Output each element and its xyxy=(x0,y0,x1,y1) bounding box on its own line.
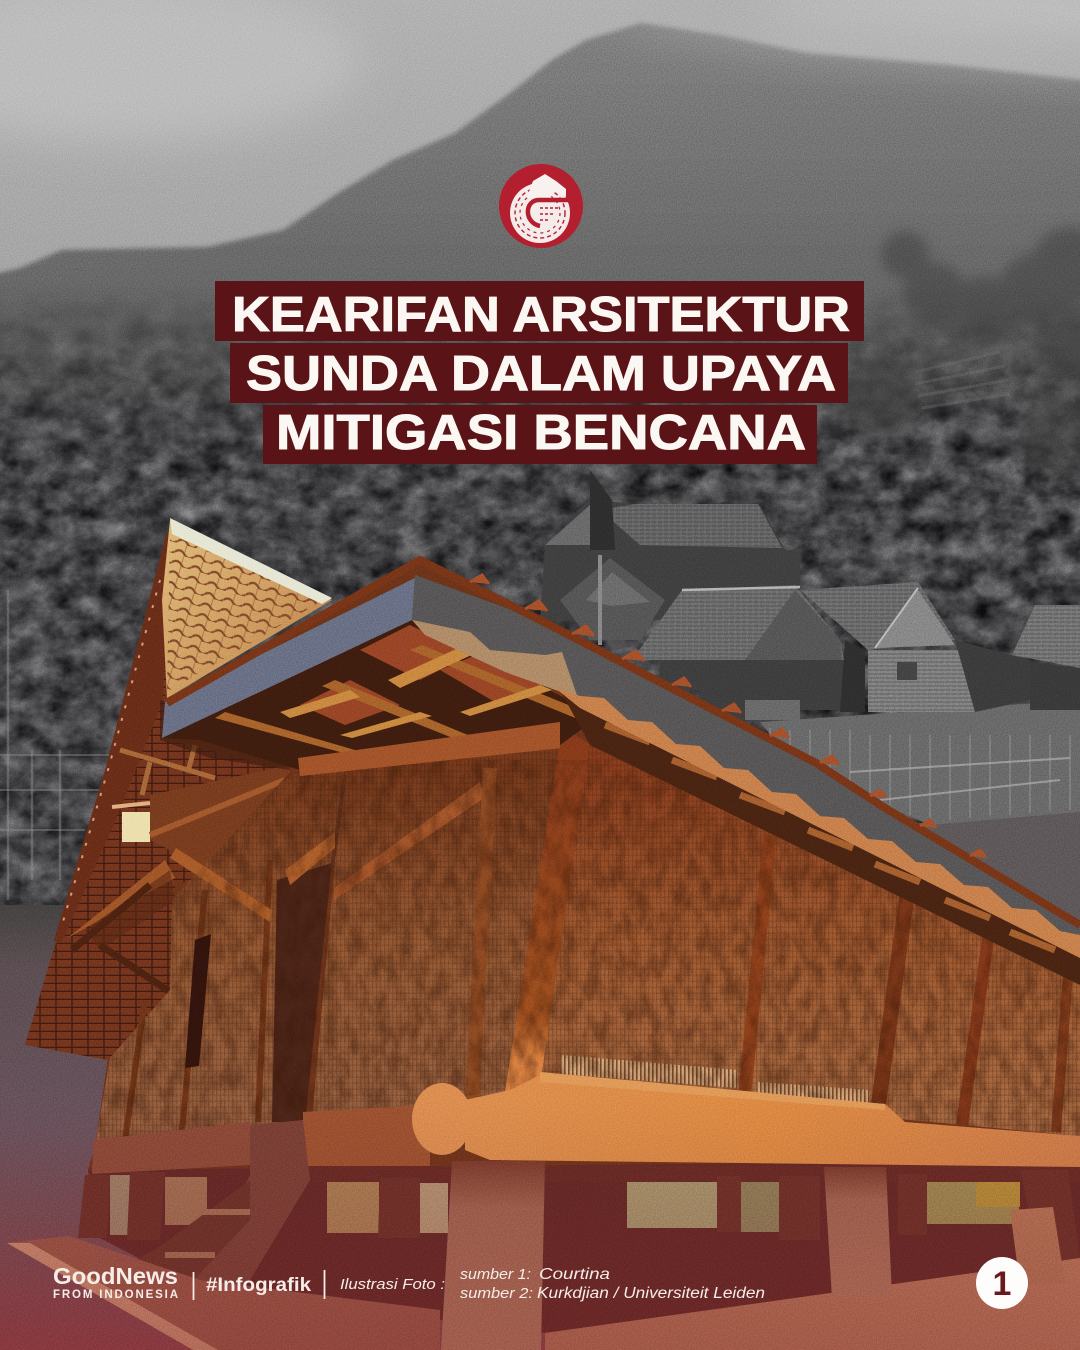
house: wall mottling xyxy=(98,760,1080,1139)
footer credits xyxy=(53,1263,765,1302)
background: village houses xyxy=(540,470,1080,722)
hashtag: #Infografik xyxy=(206,1275,311,1296)
middle house xyxy=(632,585,850,722)
brand logotype: GoodNews xyxy=(53,1263,178,1289)
background: forest xyxy=(0,227,1080,930)
source 1 xyxy=(460,1266,610,1283)
house: back gable tiles xyxy=(162,518,332,698)
house: main floor beam xyxy=(303,1072,1080,1182)
house: front stilts xyxy=(441,1161,892,1350)
title line 3: MITIGASI BENCANA xyxy=(276,406,806,460)
right treeline xyxy=(842,227,1080,480)
house: left side roof edge and gable underside xyxy=(54,528,290,955)
source 1: Courtina xyxy=(539,1266,610,1283)
foreground: right ground xyxy=(545,1258,1080,1350)
source 2: Kurkdjian / Universiteit Leiden xyxy=(537,1285,765,1302)
title xyxy=(215,281,864,464)
stone block xyxy=(1010,1207,1065,1285)
background: bamboo fence and grass xyxy=(0,590,1080,900)
house: lower left roof xyxy=(25,870,175,1060)
source 1: sumber 1: xyxy=(460,1266,531,1283)
house: dark crawl space xyxy=(88,1160,1080,1333)
bottom colour fade xyxy=(0,1100,1080,1350)
house: corner post xyxy=(505,728,592,1092)
background: mountain xyxy=(0,10,1080,500)
brand logotype: FROM INDONESIA xyxy=(53,1289,178,1301)
house: roof ridge xyxy=(167,560,1080,925)
background: right field xyxy=(900,808,1080,935)
house: rear stilts xyxy=(78,1170,1080,1260)
house: eave underside with rafters xyxy=(162,620,600,776)
brand logotype xyxy=(53,1263,178,1301)
crawl space daylight patches xyxy=(110,1173,1020,1235)
house: staircase xyxy=(130,1120,310,1320)
house: door xyxy=(272,862,332,1122)
house: front wall xyxy=(277,725,562,1120)
background: terraced slope xyxy=(915,352,1010,408)
photo credit label: Ilustrasi Foto : xyxy=(340,1276,445,1293)
house: left sill xyxy=(92,1122,250,1174)
title line 1: KEARIFAN ARSITEKTUR xyxy=(232,288,850,342)
foreground: left platform xyxy=(7,1236,440,1350)
house: grey eave boards xyxy=(162,575,1080,950)
house: silhouette backing xyxy=(25,540,1080,1170)
far right house xyxy=(1012,605,1080,710)
house: far left wall xyxy=(95,772,290,1145)
background: misty sky xyxy=(0,0,1080,1000)
house: long side wall xyxy=(540,740,1080,1136)
house: scalloped orange eave strip xyxy=(555,688,1080,958)
background: ground xyxy=(0,905,1080,1350)
source 2: sumber 2: xyxy=(460,1285,533,1302)
logo badge xyxy=(499,164,583,248)
title line 2: SUNDA DALAM UPAYA xyxy=(246,347,836,401)
back house xyxy=(540,470,800,645)
house: rafter band under long eave xyxy=(560,690,1080,985)
page number badge xyxy=(976,1257,1028,1309)
source 2 xyxy=(460,1285,765,1302)
right house xyxy=(800,582,1030,712)
page number badge: 1 xyxy=(993,1265,1011,1303)
